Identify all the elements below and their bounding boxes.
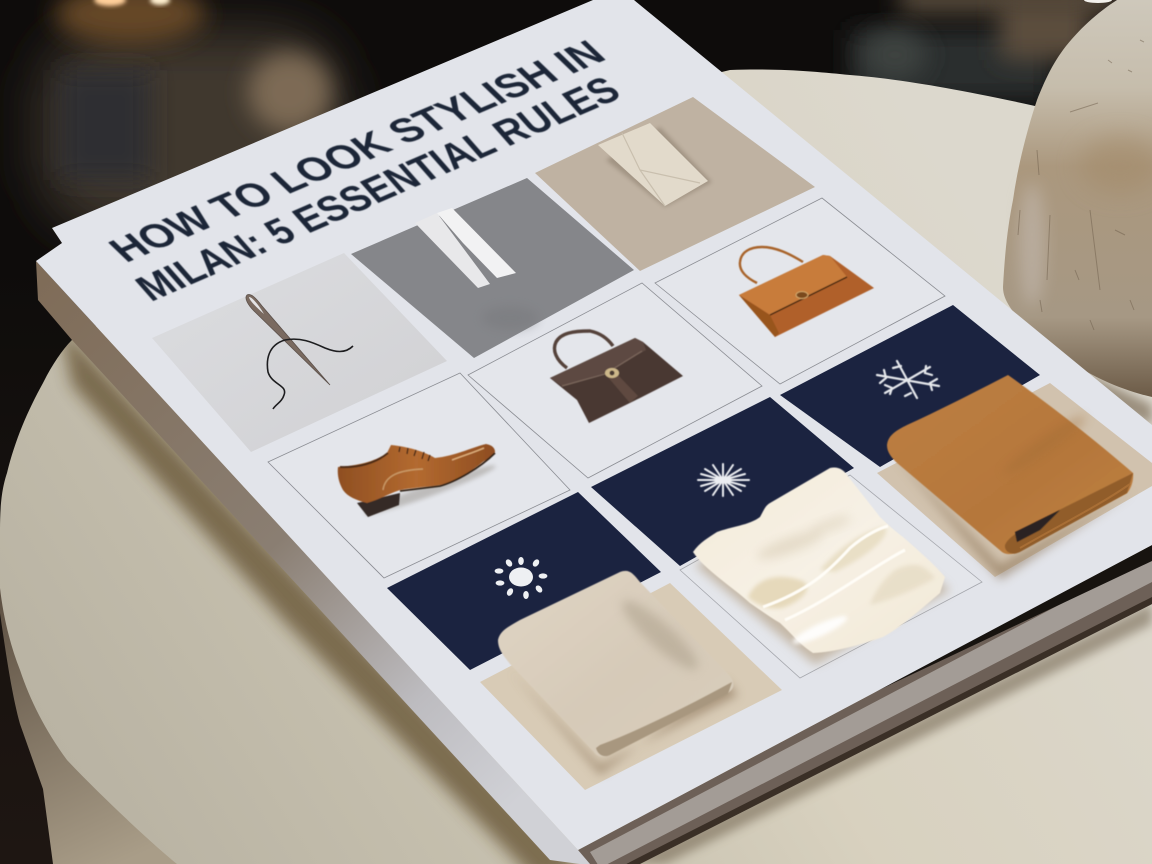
title: HOW TO LOOK STYLISH IN bbox=[99, 33, 615, 269]
panel: brown shoe bbox=[268, 373, 570, 578]
panel: navy star bbox=[591, 397, 854, 566]
panel: brown bag bbox=[468, 283, 762, 478]
icon: orange handbag bbox=[739, 247, 874, 337]
panel: orange bag bbox=[655, 198, 945, 384]
panel: grey fabric with white strips bbox=[351, 178, 634, 358]
title: MILAN: 5 ESSENTIAL RULES bbox=[127, 69, 629, 309]
panel: navy winter snowflake bbox=[780, 305, 1040, 467]
icon: thread bbox=[267, 339, 353, 409]
panel: linen swatch bbox=[480, 571, 782, 790]
icon: brown handbag bbox=[550, 331, 683, 423]
stone vase bbox=[1003, 0, 1152, 425]
icon: oxford shoe bbox=[338, 444, 495, 517]
icon: snowflake bbox=[877, 361, 939, 398]
linen cloth bbox=[498, 571, 733, 756]
page block: right edge bbox=[578, 545, 1152, 864]
icon: sun bbox=[495, 557, 547, 599]
panel: beige lapel bbox=[535, 97, 815, 271]
panel: camel swatch bbox=[877, 375, 1152, 580]
panel: silk swatch bbox=[680, 467, 982, 678]
page block: left edge bbox=[36, 261, 590, 864]
icon: needle bbox=[246, 295, 330, 385]
panel: needle and thread bbox=[152, 253, 447, 452]
panel: navy sun bbox=[387, 492, 661, 670]
silk cloth bbox=[693, 467, 945, 653]
icon: starburst bbox=[698, 464, 749, 496]
camel cloth bbox=[887, 375, 1133, 554]
